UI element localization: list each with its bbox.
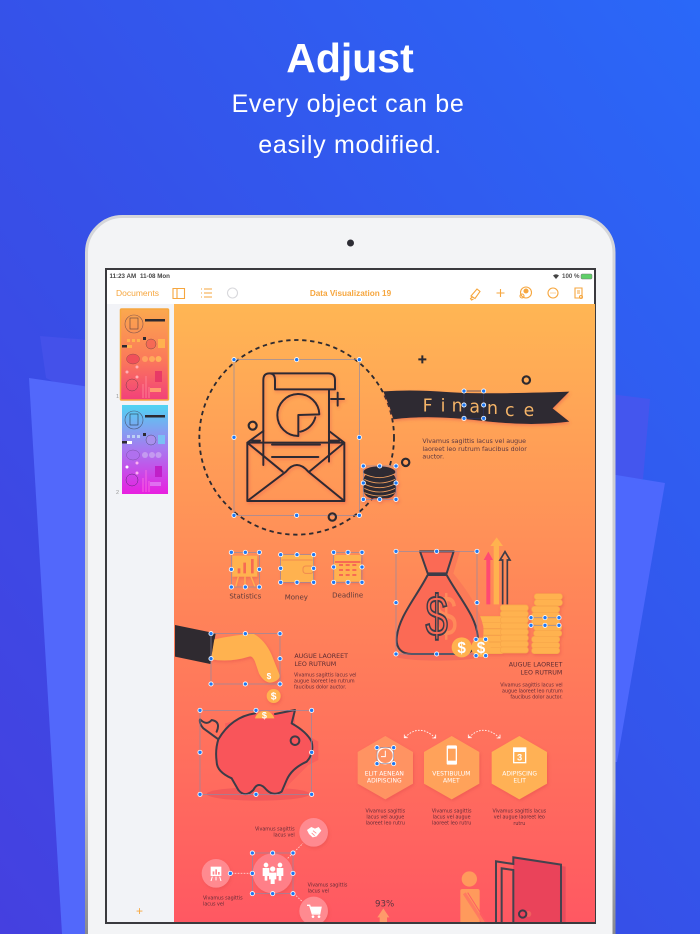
title: Adjust — [286, 35, 414, 81]
middle section group — [175, 537, 563, 703]
left body text: augue laoreet leo rutrum — [294, 678, 355, 684]
hexagon body text 1: Vivamus sagittis — [365, 808, 406, 814]
hexagon body text 3: Vivamus sagittis lacus — [492, 809, 547, 815]
coin selection — [528, 615, 561, 628]
cart label: Vivamus sagittis — [308, 883, 348, 889]
status bar: 11:23 AM — [110, 273, 136, 280]
falling coins: $ — [271, 692, 277, 703]
money bag icon: $ — [435, 585, 457, 648]
right heading: AUGUE LAOREET — [509, 661, 562, 668]
finance body text: Vivamus sagittis lacus vel augue — [422, 438, 526, 445]
connector handle — [228, 871, 233, 876]
document title: Data Visualization 19 — [310, 289, 392, 298]
hexagon 3 — [492, 736, 547, 799]
deadline icon — [331, 550, 364, 599]
handshake label: lacus vel — [273, 832, 295, 838]
finance body text: auctor. — [422, 454, 444, 461]
lower section group — [197, 708, 566, 925]
list icon — [201, 289, 212, 297]
left body text: faucibus dolor auctor. — [294, 684, 347, 690]
hexagon body text 1: lacus vel augue — [366, 814, 404, 820]
thumbnail 2 — [122, 405, 168, 494]
finance body text: laoreet leo rutrum faucibus dolor — [422, 446, 527, 453]
hand — [211, 634, 280, 683]
money bag icon: $ — [426, 585, 448, 648]
dashed circle — [199, 340, 394, 535]
camera — [347, 240, 354, 246]
left heading: LEO RUTRUM — [294, 661, 336, 668]
cart label: lacus vel — [308, 888, 329, 894]
status bar: 11-08 Mon — [140, 273, 170, 280]
handshake circle — [299, 818, 328, 847]
hexagon body text 2: laoreet leo rutru — [432, 820, 471, 826]
hexagon 1: ADIPISCING — [367, 778, 402, 785]
canvas — [174, 304, 595, 922]
dollar coins — [452, 637, 491, 658]
banner heading: Finance — [423, 397, 534, 421]
hexagon 2: AMET — [443, 778, 460, 785]
percent label: 93% — [375, 900, 394, 910]
collaborate icon — [520, 287, 532, 298]
money label: Money — [285, 593, 308, 601]
right body text: Vivamus sagittis lacus vel — [500, 683, 563, 689]
hexagon 1 — [358, 736, 413, 799]
falling coins — [264, 671, 281, 703]
team circle — [250, 850, 295, 896]
subtitle: easily modified. — [258, 131, 442, 159]
hexagon 2: VESTIBULUM — [432, 771, 470, 778]
hexagon body text 2: lacus vel augue — [433, 814, 471, 820]
add slide button: + — [136, 904, 143, 918]
brush icon — [470, 289, 480, 300]
screen — [105, 268, 596, 924]
statistics label: Statistics — [229, 592, 262, 600]
right body text: augue laoreet leo rutrum — [502, 688, 563, 694]
up arrow — [377, 908, 389, 923]
right body text: faucibus dolor auctor. — [510, 694, 563, 700]
tablet body — [86, 216, 614, 934]
door — [496, 857, 566, 923]
undo icon — [228, 288, 238, 298]
hexagon 1: ELIT AENEAN — [365, 771, 404, 778]
preview icon — [575, 288, 582, 298]
piggy bank: $ — [262, 711, 267, 721]
decorative back panels — [29, 336, 665, 934]
hexagon 3: ADIPISCING — [502, 771, 537, 778]
hexagon 3: ELIT — [513, 778, 526, 785]
dollar coins: $ — [477, 640, 486, 657]
statistics icon — [229, 550, 262, 600]
canvas content — [175, 340, 569, 925]
coin stack — [361, 463, 398, 502]
deadline label: Deadline — [332, 591, 363, 599]
ring decorations — [249, 376, 530, 521]
envelope icon — [247, 373, 344, 501]
left body text: Vivamus sagittis lacus vel — [294, 673, 356, 679]
add icon — [496, 289, 504, 297]
documents button: Documents — [116, 288, 159, 298]
presentation label: lacus vel — [203, 902, 224, 908]
ribbon banner — [383, 388, 569, 424]
hexagon 2 — [424, 736, 479, 799]
presentation circle — [202, 859, 230, 888]
growth arrows — [484, 537, 510, 604]
money icon — [278, 552, 316, 601]
sidebar icon — [173, 288, 184, 298]
hexagon body text 3: vel augue laoreet leo — [494, 815, 545, 821]
falling coins: $ — [267, 671, 272, 681]
envelope selection — [231, 357, 362, 518]
money bag icon — [393, 549, 483, 661]
left heading: AUGUE LAOREET — [294, 653, 348, 660]
piggy bank — [197, 708, 318, 801]
dollar coins: $ — [457, 640, 466, 657]
handshake label: Vivamus sagittis — [255, 826, 295, 832]
hexagon body text 3: rutru — [513, 821, 525, 827]
thumbnail 1 number: 1 — [116, 394, 119, 400]
cart circle — [299, 897, 328, 925]
subtitle: Every object can be — [232, 90, 464, 118]
sleeve — [175, 625, 216, 664]
dashed connectors — [232, 843, 305, 904]
hexagon body text 2: Vivamus sagittis — [432, 808, 472, 814]
hand selection — [208, 631, 282, 686]
gold coin stacks — [476, 594, 562, 654]
status bar: 100 % — [562, 273, 580, 280]
thumbnail 2 number: 2 — [116, 490, 119, 496]
hexagon 3: 3 — [517, 753, 522, 763]
dashed arc arrows — [404, 730, 500, 738]
thumbnail 1 — [120, 309, 168, 400]
presentation label: Vivamus sagittis — [203, 896, 243, 902]
status bar — [110, 273, 592, 280]
hexagon body text 1: laoreet leo rutru — [366, 820, 405, 826]
person figure — [460, 871, 487, 924]
more icon — [548, 288, 558, 298]
sidebar — [107, 304, 174, 922]
plus decoration — [418, 355, 426, 363]
finance header group — [199, 340, 569, 535]
toolbar — [116, 287, 582, 300]
right heading: LEO RUTRUM — [520, 669, 562, 676]
